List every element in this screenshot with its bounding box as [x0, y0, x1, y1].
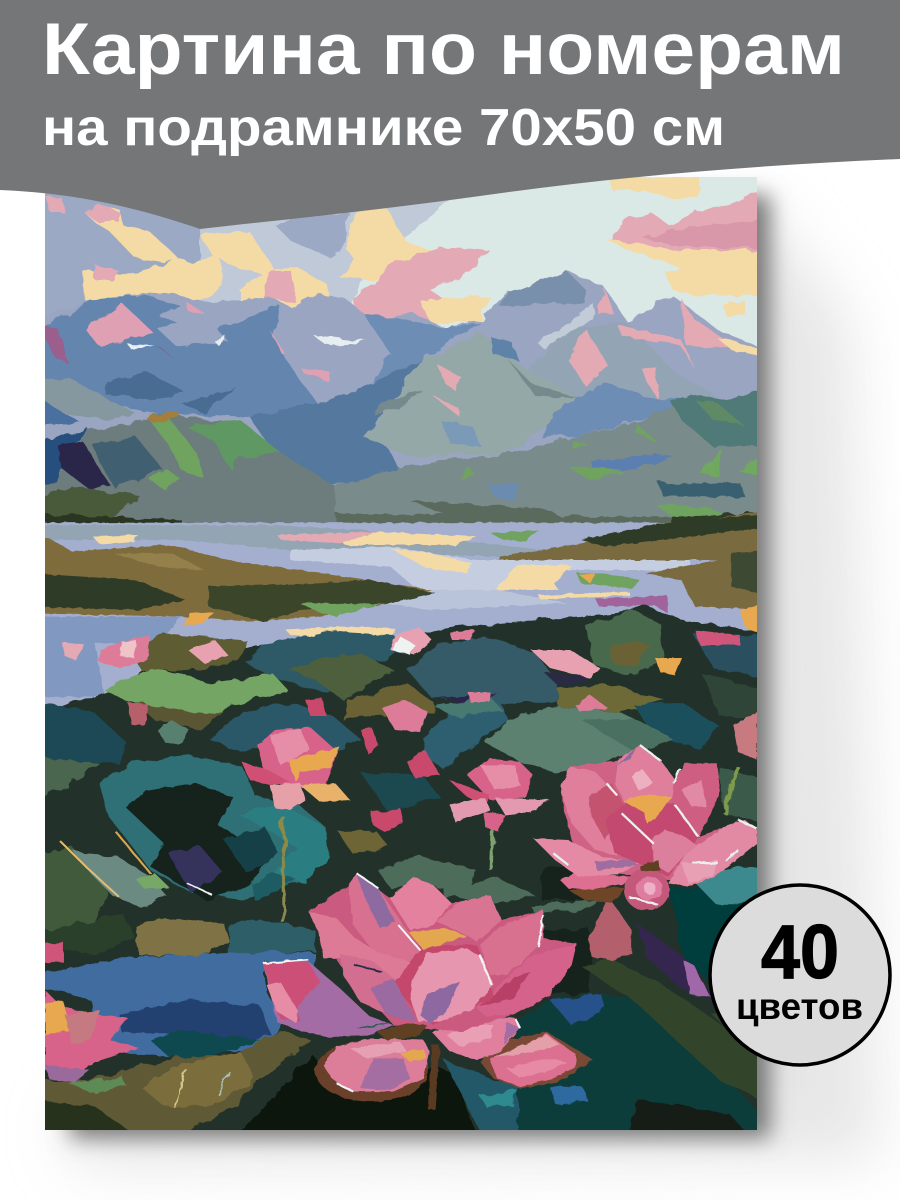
- badge: 40 colours: 40: [761, 910, 839, 995]
- lotus flower right large: [533, 745, 757, 960]
- lake and shores: [31, 510, 772, 713]
- lotus flower small center: [449, 758, 550, 832]
- sky and clouds: [45, 177, 757, 346]
- lotus flower bottom left: [45, 990, 139, 1082]
- lotus flower main: [263, 873, 593, 1110]
- badge: 40 colours: [710, 885, 890, 1065]
- lotus flower small left: [242, 727, 350, 810]
- small background lotus flowers: [62, 605, 757, 832]
- mountains: [31, 272, 772, 530]
- title: Картина по номерам: [42, 9, 845, 90]
- badge: 40 colours: цветов: [736, 986, 863, 1027]
- subtitle: на подрамнике 70х50 см: [42, 99, 725, 157]
- painting: lotus lake and mountains: [30, 160, 775, 1140]
- foreground foliage: [30, 607, 775, 1140]
- grey header banner with wavy edge: [0, 0, 900, 229]
- canvas drop shadow: [60, 195, 880, 1165]
